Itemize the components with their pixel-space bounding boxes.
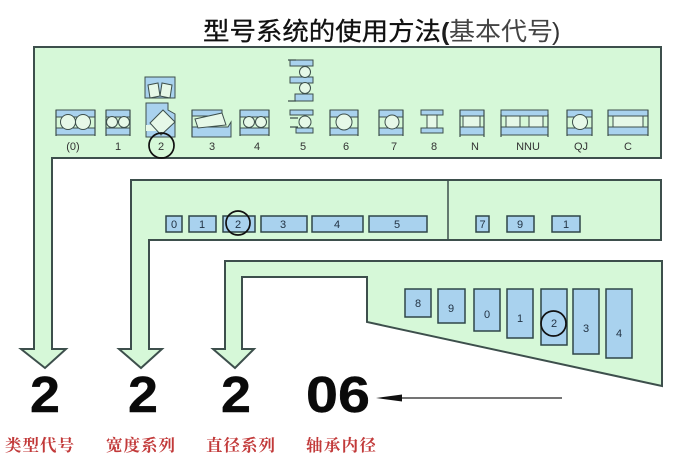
bearing type labels: 2 [158, 141, 164, 153]
red labels: 直径系列 [206, 435, 275, 455]
title [203, 18, 560, 46]
width series boxes: 1 [563, 219, 569, 231]
icon: bearing NNU [501, 110, 548, 137]
diameter series boxes: 4 [616, 328, 622, 340]
arrow: bore diameter pointer [376, 394, 562, 402]
width series boxes: 9 [517, 219, 523, 231]
diameter series boxes: 3 [583, 323, 589, 335]
diameter series boxes [405, 289, 632, 358]
icon: bearing (0) [56, 110, 95, 136]
width series boxes: 5 [394, 219, 400, 231]
icon: bearing N [460, 110, 484, 137]
width series boxes: 2 [235, 219, 241, 231]
bearing icons row [56, 60, 648, 137]
bearing type labels: QJ [574, 141, 588, 153]
title: ) [552, 18, 560, 46]
icon: bearing QJ [567, 110, 592, 136]
diameter series boxes: 9 [448, 303, 454, 315]
title: 型号系统的使用方法 [203, 18, 441, 46]
big digits: 2 [221, 366, 251, 423]
bearing type labels [66, 141, 632, 153]
icon: bearing 5 double thrust [288, 60, 313, 101]
width series boxes: 7 [479, 219, 486, 231]
diameter series boxes: 2 [551, 318, 557, 330]
width series boxes: 1 [199, 219, 205, 231]
panel: bearing type codes with arrow [21, 47, 661, 368]
title: ( [441, 18, 450, 46]
icon: bearing 2 upper [145, 77, 175, 98]
title: 基本代号 [449, 18, 553, 46]
bearing type labels: NNU [516, 141, 540, 153]
bearing type labels: 6 [343, 141, 349, 153]
bearing type labels: 8 [431, 141, 437, 153]
red labels: 类型代号 [5, 435, 74, 455]
icon: bearing 5 lower [290, 110, 313, 133]
width series boxes [166, 216, 580, 232]
icon: bearing 2 lower [146, 103, 175, 137]
bearing type labels: 5 [300, 141, 306, 153]
icon: bearing 3 [192, 110, 231, 137]
bearing type labels: 7 [391, 141, 397, 153]
big digits: 2 [128, 366, 158, 423]
icon: bearing 4 [240, 110, 269, 136]
red labels: 轴承内径 [306, 435, 376, 455]
circle: selected width 2 [226, 211, 250, 235]
icon: bearing 6 [330, 110, 358, 136]
icon: bearing 8 [421, 110, 443, 133]
icon: bearing C [608, 110, 648, 136]
bearing type labels: C [624, 141, 632, 153]
diameter series boxes: 8 [415, 298, 421, 310]
icon: bearing 7 [379, 110, 403, 136]
red labels [5, 435, 376, 455]
bearing type labels: 3 [209, 141, 215, 153]
icon: bearing 1 [106, 110, 130, 136]
big digits: 2 [30, 366, 60, 423]
circle: selected type 2 [149, 133, 174, 158]
red labels: 宽度系列 [106, 435, 175, 455]
width series boxes: 4 [334, 219, 340, 231]
width series boxes: 0 [171, 219, 177, 231]
diameter series boxes: 0 [484, 309, 490, 321]
bearing type labels: (0) [66, 141, 80, 153]
bearing type labels: 4 [254, 141, 260, 153]
big digits [30, 366, 370, 423]
divider: width series panel [447, 180, 449, 240]
big digits: 06 [306, 366, 370, 423]
width series boxes: 3 [280, 219, 286, 231]
panel: width series with arrow [119, 180, 661, 368]
panel: diameter series with arrow [213, 261, 662, 386]
bearing type labels: 1 [115, 141, 121, 153]
circle: selected diameter 2 [541, 311, 566, 336]
diameter series boxes: 1 [517, 313, 523, 325]
bearing type labels: N [471, 141, 479, 153]
